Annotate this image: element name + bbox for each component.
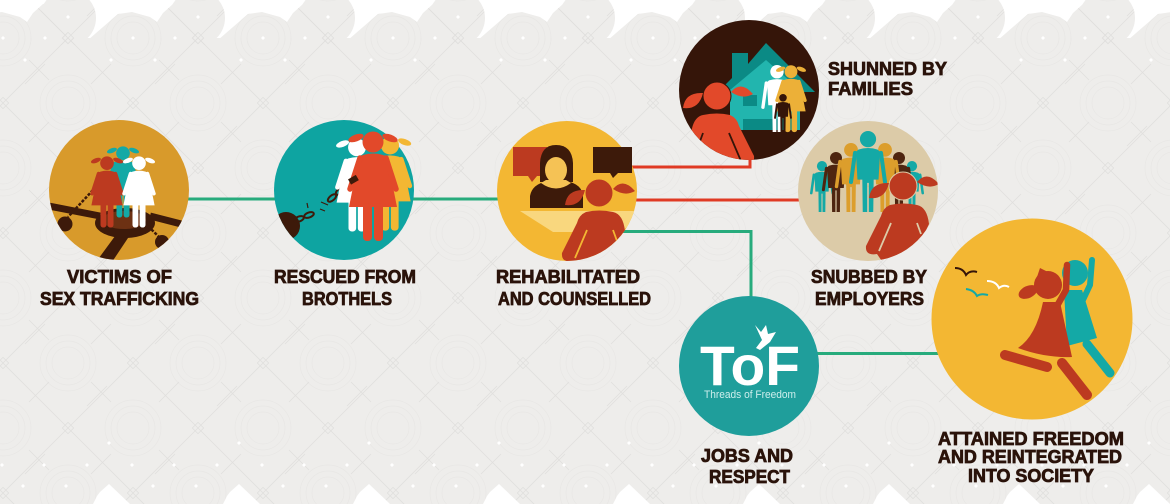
logo wordmark: ToF xyxy=(700,334,800,397)
label: snubbed by employers: EMPLOYERS xyxy=(815,288,924,309)
label: shunned by families xyxy=(828,58,948,99)
label: rehabilitated and counselled xyxy=(496,266,651,309)
label: rescued from brothels: BROTHELS xyxy=(302,288,392,309)
label: attained freedom and reintegrated into society: AND REINTEGRATED xyxy=(938,446,1122,467)
icon: red girl jumping xyxy=(1005,265,1087,395)
icon: ball and broken chain xyxy=(278,188,340,238)
icon: crowd of employers xyxy=(811,131,939,270)
panel: shunned by families xyxy=(679,20,819,160)
label: victims of sex trafficking: VICTIMS OF xyxy=(67,266,172,287)
logo tagline: Threads of Freedom xyxy=(704,389,796,401)
icon: birds xyxy=(955,268,1009,296)
connector lines xyxy=(185,155,940,354)
icon: house with family xyxy=(683,43,815,160)
icon: speech bubbles xyxy=(513,147,632,182)
label: rescued from brothels xyxy=(274,266,416,309)
panel: rehabilitated and counselled xyxy=(497,121,637,261)
label: attained freedom and reintegrated into society: INTO SOCIETY xyxy=(968,465,1095,486)
label: snubbed by employers xyxy=(811,266,928,309)
icon: three rescued girls xyxy=(335,132,412,241)
label: victims of sex trafficking xyxy=(40,266,199,309)
icon: dove xyxy=(755,325,776,350)
panel: threads of freedom logo xyxy=(679,296,819,436)
icon: three girls xyxy=(90,146,156,228)
label: victims of sex trafficking: SEX TRAFFICKING xyxy=(40,288,199,309)
icon: brown crossroads and chains xyxy=(49,190,189,262)
label: jobs and respect: JOBS AND xyxy=(701,445,793,466)
panel: rescued from brothels xyxy=(272,120,414,260)
label: rehabilitated and counselled: REHABILITATED xyxy=(496,266,640,287)
label: rescued from brothels: RESCUED FROM xyxy=(274,266,416,287)
panel: snubbed by employers xyxy=(798,121,939,270)
label: shunned by families: FAMILIES xyxy=(828,78,913,99)
icon: teal girl jumping xyxy=(1062,260,1110,373)
label: rehabilitated and counselled: AND COUNSELLED xyxy=(498,288,651,309)
label: attained freedom and reintegrated into society: ATTAINED FREEDOM xyxy=(938,428,1124,449)
label: jobs and respect: RESPECT xyxy=(709,466,791,487)
icon: counsellor and desk xyxy=(520,145,635,261)
panel: victims of sex trafficking xyxy=(49,120,189,262)
panel: attained freedom xyxy=(932,218,1132,420)
label: jobs and respect xyxy=(701,445,793,487)
label: shunned by families: SHUNNED BY xyxy=(828,58,948,79)
label: snubbed by employers: SNUBBED BY xyxy=(811,266,928,287)
label: attained freedom and reintegrated into society xyxy=(938,428,1124,486)
